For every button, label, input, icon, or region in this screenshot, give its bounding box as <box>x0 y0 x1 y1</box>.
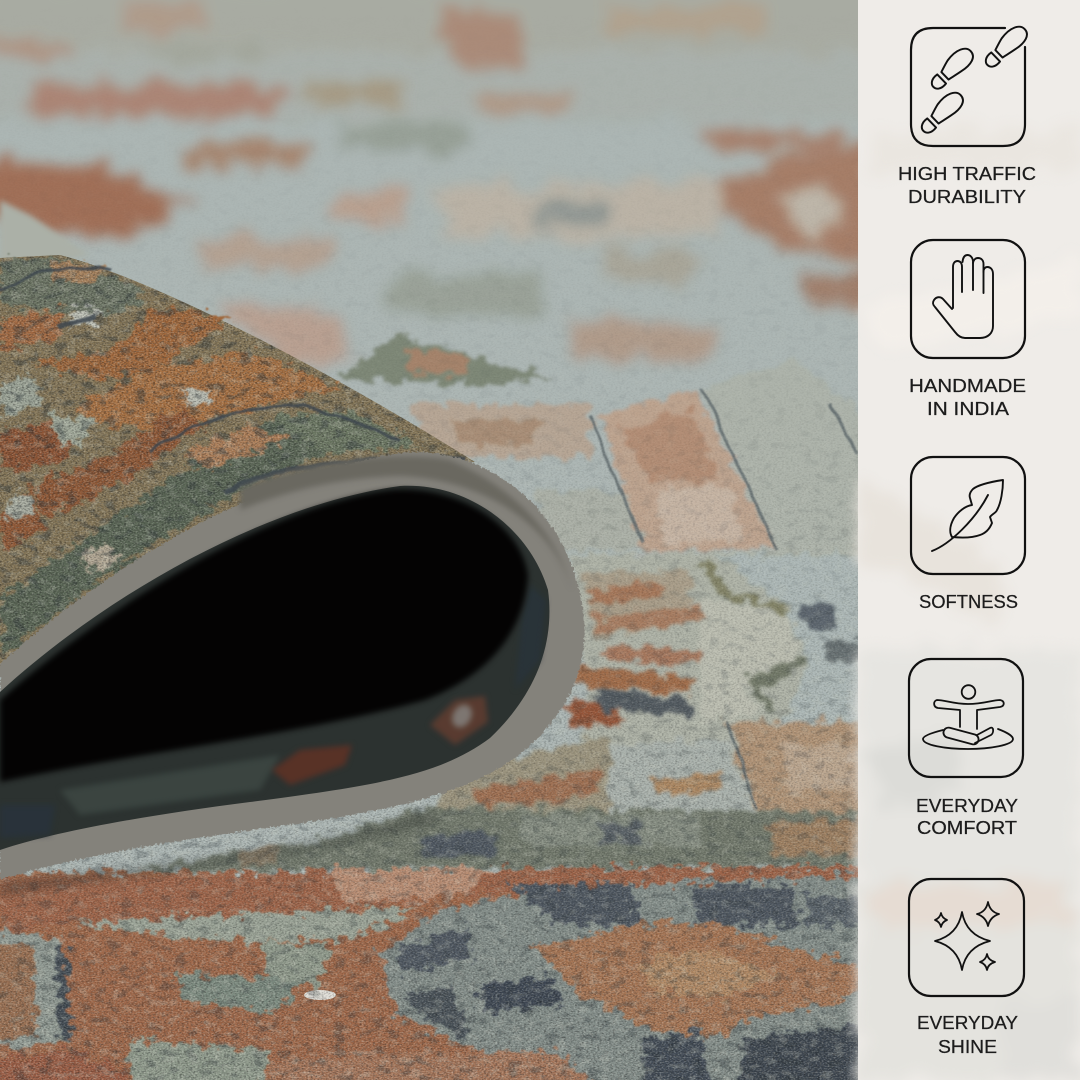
label: everyday shine: SHINE <box>938 1036 997 1057</box>
roll shadow <box>0 812 440 894</box>
label: handmade in india: IN INDIA <box>927 398 1010 419</box>
pale rug end behind the roll <box>0 200 90 270</box>
label: everyday comfort <box>916 795 1018 838</box>
dark hollow of roll <box>0 489 528 782</box>
feature: everyday shine <box>909 879 1024 1057</box>
feature: softness <box>911 457 1025 612</box>
label: softness: SOFTNESS <box>919 591 1018 612</box>
underside of roll <box>0 486 549 850</box>
small light speck on rug <box>304 990 336 1000</box>
feature: high traffic durability <box>898 22 1036 207</box>
feature: handmade in india <box>909 240 1026 419</box>
grey bound edge of roll <box>0 452 585 880</box>
blurred far part of rug <box>0 0 880 368</box>
label: high traffic durability <box>898 163 1036 207</box>
label: handmade in india <box>909 375 1026 419</box>
label: everyday comfort: EVERYDAY <box>916 795 1018 816</box>
label: high traffic durability: DURABILITY <box>908 186 1026 207</box>
feature panel <box>858 0 1080 1080</box>
label: everyday shine <box>917 1012 1018 1057</box>
underside patches <box>0 585 546 838</box>
panel tone variation showing rug through <box>858 130 1080 1080</box>
roll top surface with pattern <box>0 250 480 680</box>
dark blue edge lines <box>0 267 465 492</box>
label: handmade in india: HANDMADE <box>909 375 1026 396</box>
icon: sparkles in rounded box <box>909 879 1024 996</box>
icon: hand in rounded box <box>911 240 1025 358</box>
mid part of rug <box>130 335 880 872</box>
label: everyday comfort: COMFORT <box>917 817 1017 838</box>
rolled rug corner <box>0 200 585 894</box>
panel background <box>858 0 1080 1080</box>
rug weave and mottling, strongest near the camera <box>0 226 858 1080</box>
darker shade on edge of roll <box>240 456 572 590</box>
roll mottling <box>0 250 480 680</box>
blue-grey woven lines of the central panel <box>590 387 857 810</box>
icon: meditating figure in rounded box <box>909 659 1023 777</box>
icon: feather in rounded box <box>911 457 1025 574</box>
icon: footprints in rounded box <box>911 22 1031 146</box>
label: everyday shine: EVERYDAY <box>917 1012 1018 1033</box>
feature: everyday comfort <box>909 659 1023 838</box>
foreground orange and blue medallion <box>0 866 880 1080</box>
label: high traffic durability: HIGH TRAFFIC <box>898 163 1036 184</box>
